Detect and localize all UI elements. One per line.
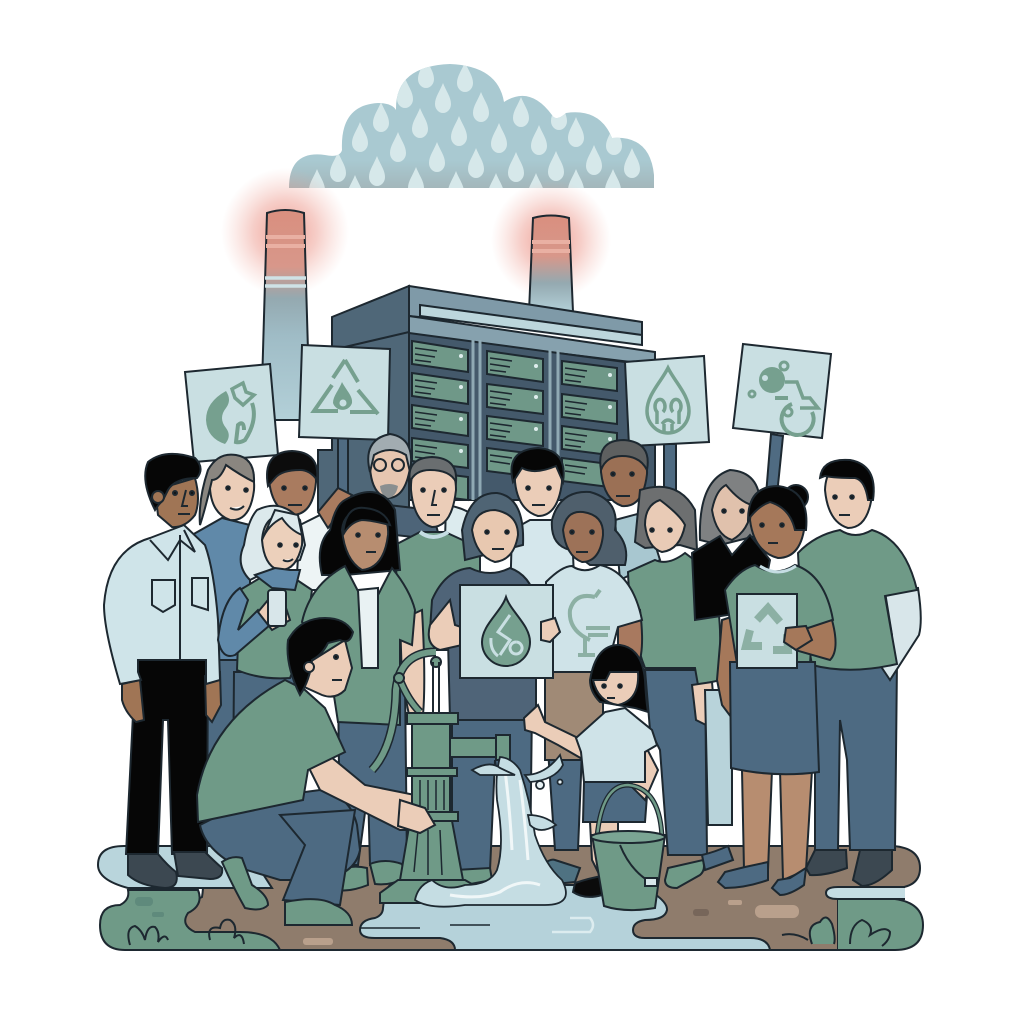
pump body (412, 724, 450, 768)
ground: soil, puddle and grass (98, 846, 923, 950)
water stream and splash (415, 755, 566, 907)
data centre factory building (318, 286, 655, 510)
person: man in back row (267, 451, 352, 590)
person: man with dark skin, right back (600, 440, 660, 580)
smokestack: left (261, 210, 310, 420)
protest sign: drop with pipes (625, 356, 709, 446)
person: woman with hair bun and recycling sign (717, 485, 836, 895)
person: woman with curly hair (538, 492, 642, 885)
protest sign: globe (185, 364, 278, 462)
smokestack glow: left (221, 168, 349, 296)
person: man in green tee with hand in pocket (798, 460, 921, 886)
rack status lights (459, 354, 612, 453)
spout (448, 738, 505, 757)
arm hands (122, 672, 221, 722)
illustration: community gathered at a water pump before a data centre (97, 64, 924, 951)
person: man in green tee, centre back (395, 457, 485, 650)
server rack column 2 (487, 351, 543, 478)
server rack column 1 (412, 341, 468, 500)
smokestack glow: right (491, 180, 611, 300)
protest sign: contamination diagram (733, 344, 831, 438)
person: man in white tee, centre back (510, 448, 575, 600)
cloud with water drops (289, 64, 654, 188)
person: man in white shirt and black trousers (104, 454, 222, 888)
person: crouching man in green tee (197, 618, 433, 925)
protest sign: recycling drop (299, 345, 390, 440)
person: woman with black top (692, 470, 770, 870)
smokestack: right (529, 216, 573, 312)
sign poles (338, 434, 783, 505)
person: woman in centre holding water sign (429, 493, 560, 885)
trousers (200, 790, 360, 880)
arm (305, 752, 433, 830)
bucket (591, 785, 665, 910)
pump handle (372, 652, 436, 770)
pump base plate (380, 880, 482, 903)
person: woman with long hair and cardigan (302, 492, 424, 890)
person: older woman with phone (218, 506, 312, 790)
tee (197, 680, 345, 822)
server rack column 3 (562, 361, 617, 488)
boots (128, 852, 222, 888)
person: man with glasses (368, 434, 440, 540)
hand pump (372, 652, 510, 903)
person: woman in green sweater (628, 487, 721, 888)
hands on the pump (398, 800, 435, 833)
head (300, 640, 352, 697)
head (155, 478, 198, 527)
person: woman in blue shirt (192, 455, 254, 790)
shoes (222, 857, 352, 925)
sign held by centre woman (460, 585, 553, 678)
person: young girl with bucket (524, 645, 658, 897)
white shirt (104, 525, 220, 684)
black trousers (126, 655, 208, 854)
